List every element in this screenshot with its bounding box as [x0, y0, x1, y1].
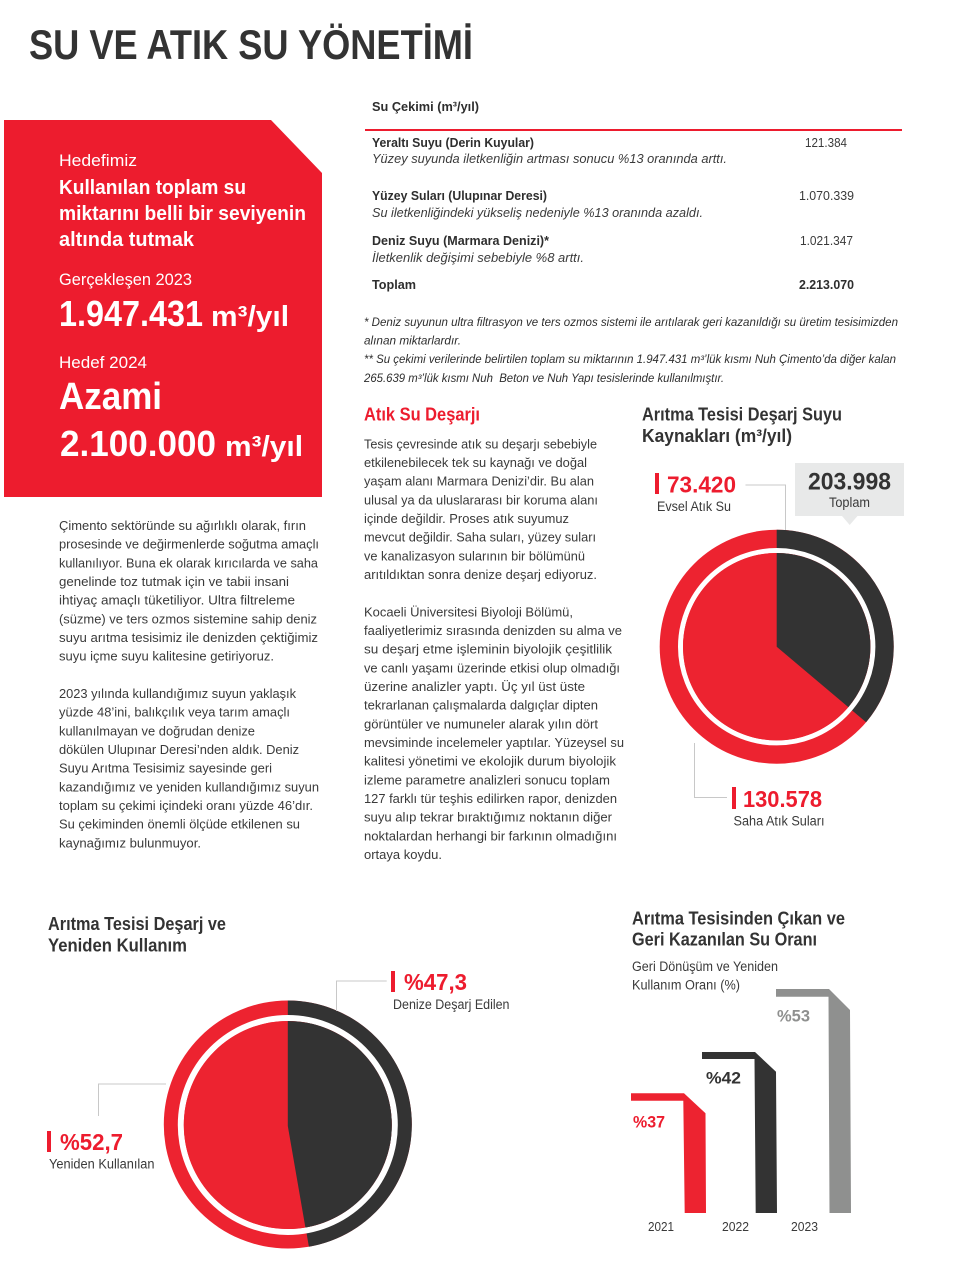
row: total: Toplam [372, 278, 416, 292]
footnotes: alınan miktarlardır. [364, 336, 461, 348]
row: surface water: Su iletkenliğindeki yükseliş nedeniyle %13 oranında azaldı. [372, 206, 703, 220]
callout: total [795, 463, 904, 525]
row: sea water: Deniz Suyu (Marmara Denizi)* [372, 234, 549, 248]
bar: 2022 [702, 1052, 777, 1234]
target statement: miktarını belli bir seviyenin [59, 203, 306, 225]
label: discharged to sea: %47,3 [404, 969, 467, 995]
heading: discharge and reuse: Yeniden Kullanım [48, 936, 187, 956]
text block: left column: yüzde 48’ini, balıkçılık veya tarım amaçlı [59, 705, 290, 720]
label: site wastewater [732, 786, 824, 829]
chart subtitle: Kullanım Oranı (%) [632, 977, 740, 992]
text block: left column: kazandığımız ve yeniden kullandığımız suyun [59, 779, 319, 794]
row: sea water: İletkenlik değişimi sebebiyle %8 arttı. [372, 251, 584, 265]
text block: middle column: etkilenebilecek tek su kaynağı ve doğal [364, 455, 587, 470]
text block: middle column: noktalardan herhangi bir farkının olmadığını [364, 828, 617, 843]
text block: middle column: kalitesi yönetimi ve ekolojik durum biyolojik [364, 754, 616, 769]
callout: total: 203.998 [808, 468, 891, 496]
heading: recovered water ratio: Geri Kazanılan Su Oranı [632, 930, 817, 950]
row: groundwater: Yüzey suyunda iletkenliğin artması sonucu %13 oranında arttı. [372, 152, 727, 166]
text block: middle column: mevsiminde incelemeler yaptılar. Yüzeysel su [364, 735, 624, 750]
chart: recycling ratio bars [631, 989, 851, 1234]
text block: left column: prosesinde ve değirmenlerde soğutma amaçlı [59, 537, 319, 552]
target 2024 value: 2.100.000 [60, 423, 216, 464]
text block: middle column: Tesis çevresinde atık su deşarjı sebebiyle [364, 436, 597, 451]
footnotes: * Deniz suyunun ultra filtrasyon ve ters ozmos sistemi ile arıtılarak geri kazanıldığı su üretim tesisimizden [364, 317, 898, 329]
text block: middle column: yaşam alanı Marmara Denizi’dir. Bu alan [364, 474, 594, 489]
bar: 2021 [631, 1093, 706, 1234]
bar: 2021: 2021 [648, 1219, 674, 1234]
text block: left column: Suyu Arıtma Tesisimiz sayesinde geri [59, 761, 272, 776]
text block: middle column: Kocaeli Üniversitesi Biyoloji Bölümü, [364, 604, 573, 619]
chart subtitle [632, 959, 778, 992]
panel: target [4, 120, 322, 497]
chart subtitle: Geri Dönüşüm ve Yeniden [632, 959, 778, 974]
actual 2023 value: 1.947.431 [59, 293, 203, 334]
leader line: reused [98, 1084, 166, 1116]
row: surface water [372, 189, 854, 220]
text block: middle column: ortaya koydu. [364, 847, 442, 862]
leader line: discharged [336, 981, 387, 1011]
row: groundwater: Yeraltı Suyu (Derin Kuyular) [372, 136, 534, 150]
label: reused [47, 1129, 154, 1172]
table: water withdrawal [365, 100, 902, 292]
label: domestic wastewater [655, 472, 736, 514]
heading: discharge and reuse [48, 914, 226, 956]
label: discharged to sea [391, 969, 510, 1012]
label: domestic wastewater: Evsel Atık Su [657, 499, 731, 514]
footnotes [363, 317, 898, 385]
title: SU VE ATIK SU YÖNETİMİ [29, 21, 473, 68]
text block: left column: kullanılıyor. Buna ek olarak kırıcılarda ve saha [59, 555, 319, 570]
actual 2023 value: m³/yıl [211, 301, 289, 333]
chart: discharge and reuse pie [164, 1000, 412, 1248]
text block: left column: suyu arıtma tesisimiz ile denizden çektiğimiz [59, 630, 318, 645]
bar: 2022: %42 [706, 1068, 741, 1087]
target 2024 label: Hedef 2024 [59, 353, 147, 372]
bar: 2023 [776, 989, 851, 1234]
text block: middle column: görüntüler ve numuneler alarak yılın dört [364, 716, 598, 731]
row: total: 2.213.070 [799, 278, 854, 292]
text block: left column: genelinde toz tutmak için ve tabii insani [59, 574, 289, 589]
target 2024 value: Azami [59, 376, 162, 418]
text block: middle column: ulusal ya da uluslararası bir koruma alanı [364, 492, 598, 507]
text block: left column: toplam su çekimi içindeki oranı yüzde 46’dır. [59, 798, 313, 813]
heading: recovered water ratio [632, 908, 845, 950]
heading: recovered water ratio: Arıtma Tesisinden Çıkan ve [632, 908, 845, 928]
row: surface water: Yüzey Suları (Ulupınar Deresi) [372, 189, 547, 203]
bar: 2023: %53 [777, 1007, 810, 1026]
text block: left column: ihtiyaç amaçlı tüketiliyor. Ultra filtreleme [59, 593, 295, 608]
table heading: Su Çekimi (m³/yıl) [372, 100, 479, 114]
target statement: altında tutmak [59, 229, 195, 251]
text block: left column: dökülen Ulupınar Deresi’nden aldık. Deniz [59, 742, 299, 757]
leader line: domestic [746, 485, 786, 530]
row: sea water [372, 234, 853, 265]
text block: middle column: ve canlı yaşamı üzerinde etkisi olup olmadığı [364, 660, 620, 675]
text block: left column: Çimento sektöründe su ağırlıklı olarak, fırın [59, 518, 306, 533]
label: domestic wastewater: 73.420 [667, 472, 736, 498]
callout: total: Toplam [829, 495, 870, 510]
label: reused: Yeniden Kullanılan [49, 1157, 154, 1172]
actual 2023 label: Gerçekleşen 2023 [59, 270, 192, 289]
heading: discharge sources: Arıtma Tesisi Deşarj Suyu [642, 404, 842, 424]
text block: middle column: suyu alıp tekrar bıraktığımız noktanın diğer [364, 810, 613, 825]
heading: discharge sources: Kaynakları (m³/yıl) [642, 426, 792, 446]
footnotes: ** Su çekimi verilerinde belirtilen toplam su miktarının 1.947.431 m³’lük kısmı Nuh Çimento’da diğer kalan [364, 354, 896, 366]
row: surface water: 1.070.339 [799, 189, 854, 203]
bar: 2021: %37 [633, 1112, 665, 1131]
text block: left column: Su çekiminden önemli ölçüde etkilenen su [59, 817, 300, 832]
row: groundwater [372, 136, 847, 166]
bar: 2023: 2023 [791, 1219, 818, 1234]
label: discharged to sea: Denize Deşarj Edilen [393, 997, 510, 1012]
text block: left column [59, 518, 319, 850]
target 2024 value: m³/yıl [225, 431, 303, 463]
row: sea water: 1.021.347 [800, 234, 853, 248]
text block: middle column: su deşarj etme işleminin biyolojik çeşitlilik [364, 642, 612, 657]
row: total [372, 278, 854, 292]
text block: middle column: faaliyetlerimiz sırasında denizden su alma ve [364, 623, 622, 638]
bar: 2022: 2022 [722, 1219, 749, 1234]
heading: discharge sources [642, 404, 842, 446]
row: groundwater: 121.384 [805, 136, 847, 150]
label: reused: %52,7 [60, 1129, 123, 1155]
text block: left column: (süzme) ve ters ozmos sistemine sahip deniz [59, 611, 317, 626]
target statement [59, 177, 306, 251]
text block: left column: 2023 yılında kullandığımız suyun yaklaşık [59, 686, 296, 701]
label: site wastewater: 130.578 [743, 786, 822, 812]
text block: left column: kullanılmayan ve doğrudan denize [59, 723, 255, 738]
text block: middle column: arıtıldıktan sonra denize deşarj ediyoruz. [364, 567, 597, 582]
heading: wastewater discharge: Atık Su Deşarjı [364, 404, 480, 424]
chart: discharge sources pie [660, 530, 894, 764]
footnotes: 265.639 m³’lük kısmı Nuh Beton ve Nuh Yapı tesislerinde kullanılmıştır. [363, 373, 724, 385]
leader line: site [694, 743, 727, 798]
label: site wastewater: Saha Atık Suları [734, 814, 824, 829]
target 2024 value [59, 376, 303, 464]
target label: Hedefimiz [59, 151, 137, 170]
heading: discharge and reuse: Arıtma Tesisi Deşarj ve [48, 914, 226, 934]
text block: middle column: içinde değildir. Proses atık suyumuz [364, 511, 569, 526]
text block: left column: suyu içme suyu kalitesine getiriyoruz. [59, 649, 274, 664]
text block: middle column: tekrarlanan çalışmalarda dalgıçlar dipten [364, 698, 598, 713]
text block: middle column: ve kanalizasyon sularının bir bölümünü [364, 548, 585, 563]
text block: left column: kaynağımız bulunmuyor. [59, 835, 201, 850]
target statement: Kullanılan toplam su [59, 177, 246, 199]
text block: middle column: üzerine analizler yaptı. Üç yıl üst üste [364, 679, 585, 694]
text block: middle column: mevcut değildir. Saha suları, yüzey suları [364, 530, 596, 545]
actual 2023 value [59, 293, 289, 334]
text block: middle column [364, 436, 624, 862]
text block: middle column: 127 farklı tür teşhis edilirken rapor, denizden [364, 791, 617, 806]
text block: middle column: izleme parametre analizleri sonucu toplam [364, 772, 610, 787]
